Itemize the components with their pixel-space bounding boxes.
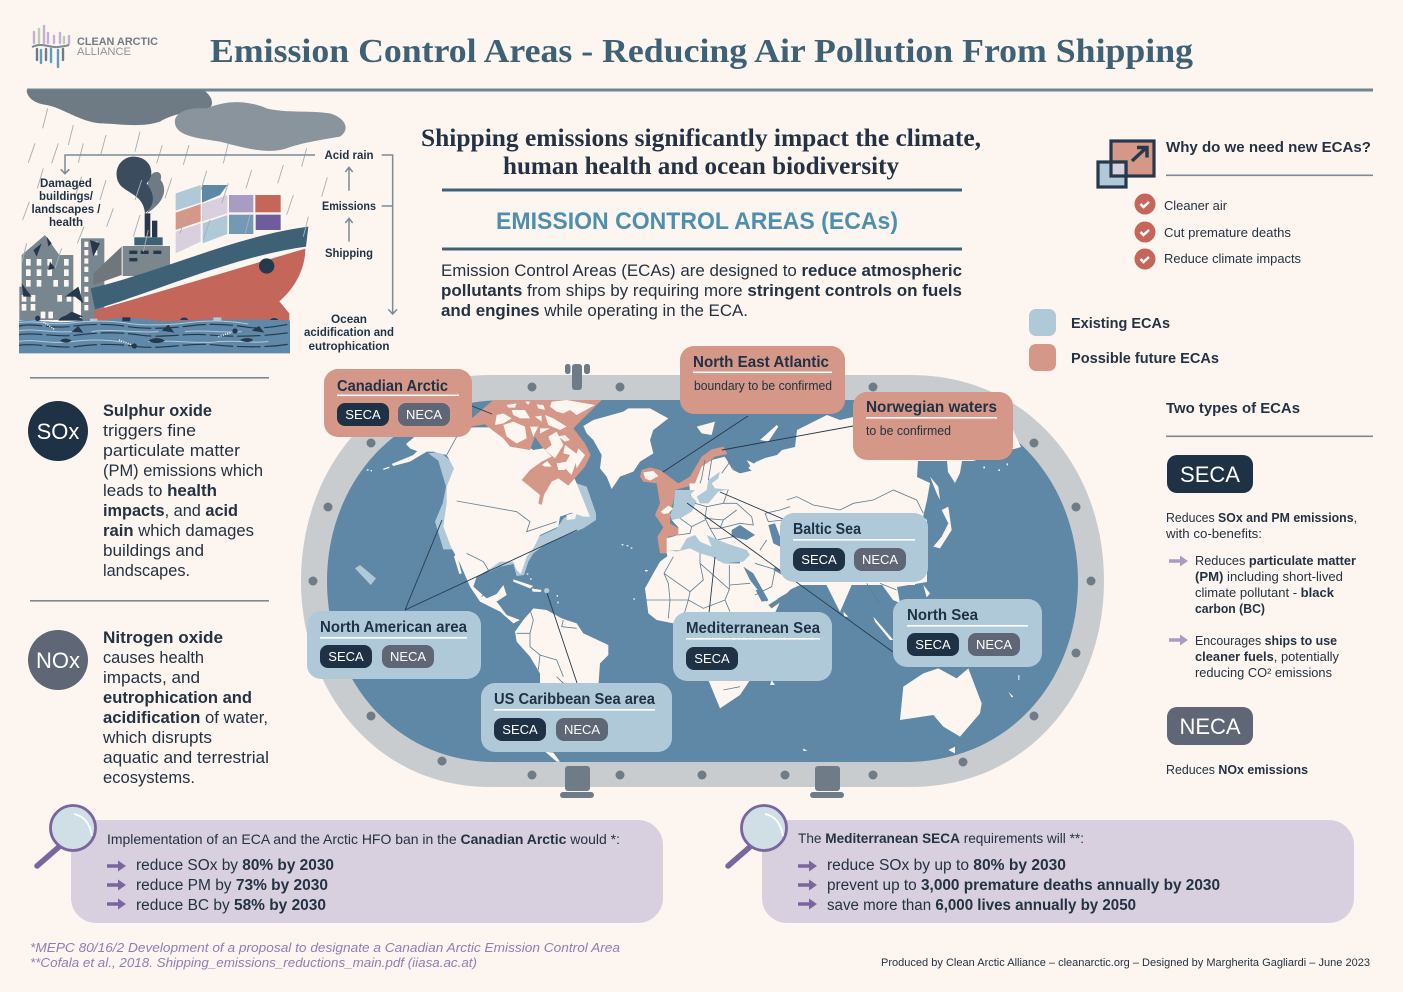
logo: Clean Arctic Alliance: ALLIANCE [77,46,131,58]
illustration labels: landscapes / [32,204,101,216]
centre heading [421,125,981,180]
SOx text: particulate matter [103,441,240,460]
illustration labels: Ocean [331,314,367,326]
leader lines [405,406,893,683]
results: reduce SOx by 80% by 2030 [136,857,334,874]
porthole [259,258,274,274]
SOx badge: SOx [37,419,79,444]
heading: Two types of ECAs [1166,401,1300,417]
illustration labels: Shipping [325,248,373,260]
callout: Canadian Arctic: Canadian Arctic [337,378,448,395]
benefit: particulate matter: carbon (BC) [1195,602,1265,616]
benefit: particulate matter: Reduces particulate matter [1195,554,1356,568]
callout: North American area [307,611,481,679]
callout: Norwegian waters: Norwegian waters [866,399,997,416]
SECA description: Reduces SOx and PM emissions, [1166,511,1357,525]
SECA badge [1167,455,1253,493]
benefit: cleaner fuels: reducing CO² emissions [1195,666,1332,680]
credits: Produced by Clean Arctic Alliance – cleanarctic.org – Designed by Margherita Gagliardi – June 2023 [881,957,1370,969]
funnels and superstructure [93,213,170,285]
NOx text: which disrupts [102,728,212,747]
benefit: cleaner fuels: Encourages ships to use [1195,634,1337,648]
callout: Canadian Arctic: SECA [345,407,381,422]
callout: North Sea: North Sea [907,607,978,624]
NECA description: Reduces NOx emissions [1166,763,1308,777]
SOx badge [28,401,88,461]
callout: Mediterranean Sea: Mediterranean Sea [686,620,820,637]
NECA badge: NECA [1179,714,1241,739]
checklist [1134,194,1301,270]
European borders [678,457,790,540]
SOx text [103,401,263,580]
illustration labels: Damaged [40,178,92,190]
panel: two types of ECAs [1165,401,1373,777]
panel: SOx [28,377,269,580]
results: prevent up to 3,000 premature deaths annually by 2030 [827,877,1220,894]
SOx text: leads to health [103,481,217,500]
NOx text: Nitrogen oxide [103,628,223,647]
callout: North East Atlantic: boundary to be confirmed [694,379,832,393]
benefit: particulate matter: (PM) including short-lived [1195,570,1343,584]
logo: Clean Arctic Alliance: CLEAN ARCTIC [77,36,158,48]
benefit: particulate matter [1195,554,1356,616]
legend: Existing ECAs [1071,316,1170,332]
callout: North Sea: NECA [976,637,1012,652]
callout: Baltic Sea [780,513,928,582]
panel: Canadian Arctic benefits [37,806,663,923]
NOx text: aquatic and terrestrial [103,748,269,767]
NOx text: ecosystems. [103,768,195,787]
benefit: particulate matter: climate pollutant - black [1195,586,1334,600]
SECA description: with co-benefits: [1165,527,1262,541]
arrow [1169,556,1188,566]
land: North America, Greenland, Caribbean [367,408,668,623]
NOx text: eutrophication and [103,688,252,707]
SOx text: Sulphur oxide [103,401,212,420]
Asia detail, Australia, islands [697,422,1019,753]
future ECA: North East Atlantic [640,447,727,553]
SOx text: impacts, and acid [103,501,238,520]
NOx text [102,628,269,787]
smoke [117,157,164,213]
Asian borders [717,490,923,690]
footnotes [30,940,620,970]
North Sea and Baltic ECA [670,490,697,520]
illustration labels [32,150,394,353]
panel: NOx [28,600,269,787]
cloud light [175,102,346,151]
land: Africa and Middle East [645,530,797,630]
arrow [1169,634,1188,646]
benefit: cleaner fuels [1195,634,1340,680]
Mediterranean ECA and African borders [645,535,788,618]
White Sea, Black Sea and Caspian [732,467,780,547]
bolts [308,382,1096,780]
SOx text: triggers fine [103,421,196,440]
callout: Baltic Sea: NECA [862,552,898,567]
heading: Why do we need new ECAs? [1166,140,1371,156]
illustration labels: Emissions [322,201,376,213]
callout: US Caribbean Sea area: US Caribbean Sea area [494,691,655,708]
checklist: Cut premature deaths [1164,225,1292,240]
illustration labels: health [49,217,83,229]
callout: North Sea [893,599,1042,667]
legend: Possible future ECAs [1071,351,1219,367]
results: reduce PM by 73% by 2030 [136,877,328,894]
footnotes: **Cofala et al., 2018. Shipping_emissions_reductions_main.pdf (iiasa.ac.at) [30,955,477,970]
map: world in porthole [301,364,1104,798]
ocean [327,400,1078,762]
checklist: Reduce climate impacts [1164,251,1301,266]
cloud dark [27,90,212,125]
panel: why new ECAs [1098,140,1373,270]
NOx badge [28,630,88,690]
centre heading: human health and ocean biodiversity [503,153,899,180]
existing ECA: North American west and east coasts [355,452,596,593]
icon: magnifier [728,806,786,866]
land: Europe [667,457,790,560]
centre heading: Shipping emissions significantly impact the climate, [421,125,981,152]
ECA description: Emission Control Areas (ECAs) are designed to reduce atmospheric [441,262,962,280]
hull [93,249,305,325]
SECA description [1165,511,1357,541]
illustration labels: Acid rain [324,150,374,162]
illustration labels: acidification and [304,327,394,339]
checklist: Cleaner air [1164,198,1228,213]
SOx text: rain which damages [103,521,254,540]
ECA description: pollutants from ships by requiring more stringent controls on fuels [441,282,962,300]
callout: Canadian Arctic: NECA [406,407,442,422]
SECA badge: SECA [1180,462,1240,487]
SOx text: (PM) emissions which [103,461,263,480]
NOx text: causes health [103,648,204,667]
callout: US Caribbean Sea area: SECA [502,722,538,737]
SOx text: landscapes. [103,561,190,580]
results: reduce SOx by up to 80% by 2030 [827,857,1066,874]
callout: Norwegian waters [853,392,1013,460]
NOx text: impacts, and [103,668,200,687]
results: reduce BC by 58% by 2030 [136,897,326,914]
callout: Mediterranean Sea [673,612,832,681]
lead text: The Mediterranean SECA requirements will **: [798,830,1084,846]
callout: North American area: NECA [390,649,426,664]
logo: Clean Arctic Alliance [32,26,158,67]
callout: US Caribbean Sea area: NECA [564,722,600,737]
Arctic islands [495,400,595,475]
connector arrows [61,155,397,314]
results [798,857,1220,914]
ECA heading: EMISSION CONTROL AREAS (ECAs) [496,208,898,235]
callout: Baltic Sea: Baltic Sea [793,521,861,538]
NOx text: acidification of water, [103,708,268,727]
callout: Mediterranean Sea: SECA [694,651,730,666]
North America [355,408,668,623]
callout: Baltic Sea: SECA [801,552,837,567]
callout: North American area: SECA [328,649,364,664]
legend [1029,309,1219,371]
callout: US Caribbean Sea area [481,683,672,752]
rain [22,108,327,268]
panel: Mediterranean benefits [728,806,1354,923]
icon: magnifier [37,806,96,866]
debris and dead fish [35,315,278,349]
illustration labels: buildings/ [39,191,94,203]
callout: North East Atlantic: North East Atlantic [693,354,829,371]
callout: North American area: North American area [320,619,467,636]
ECA description: and engines while operating in the ECA. [441,302,748,320]
latches [560,364,844,798]
SOx text: buildings and [103,541,204,560]
callout: North East Atlantic [680,346,845,414]
benefit: cleaner fuels: cleaner fuels, potentially [1195,650,1340,664]
ECA description [441,262,962,320]
frame [301,375,1104,787]
NECA badge [1167,707,1253,745]
borders [447,437,557,603]
polluted sea [19,315,290,353]
NOx badge: NOx [36,648,80,673]
callout: Norwegian waters: to be confirmed [866,424,951,438]
illustration: ship, pollution and impacts [19,90,397,325]
future ECA: Canadian Arctic [470,400,602,505]
South America [515,608,608,762]
containers [176,185,281,253]
illustration labels: eutrophication [308,341,390,353]
callout: North Sea: SECA [915,637,951,652]
land: Asia [740,415,1021,612]
lead text: Implementation of an ECA and the Arctic HFO ban in the Canadian Arctic would *: [107,831,620,847]
results [107,857,334,914]
title: Emission Control Areas - Reducing Air Pollution From Shipping [210,33,1193,70]
footnotes: *MEPC 80/16/2 Development of a proposal to designate a Canadian Arctic Emission Control Area [30,940,620,955]
results: save more than 6,000 lives annually by 2050 [827,897,1136,914]
icon: expanding squares [1098,141,1154,187]
deck band [91,227,308,309]
callout: Canadian Arctic [324,369,472,437]
buildings [19,235,104,320]
land: southern Africa, Australia, islands [697,422,1019,753]
